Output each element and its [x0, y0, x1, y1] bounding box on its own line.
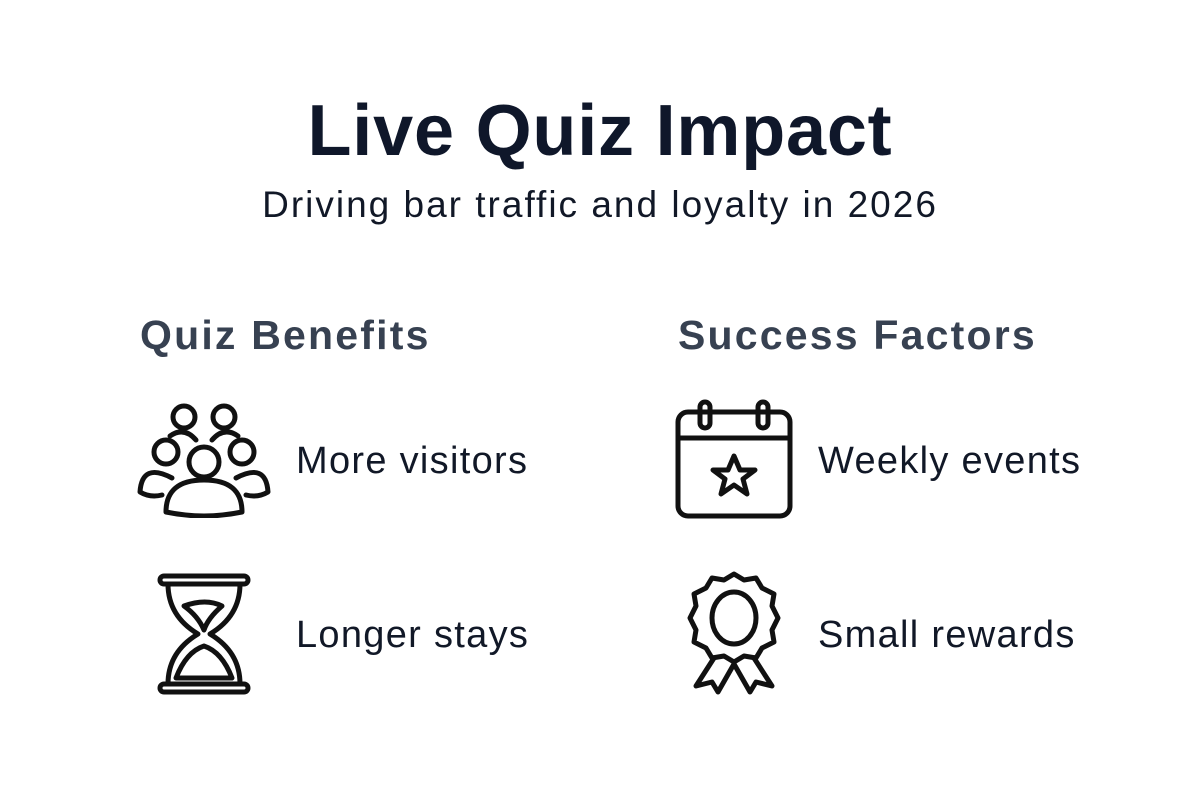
icon: calendar with star — [676, 400, 792, 518]
text: small rewards: Small rewards — [818, 614, 1076, 656]
subtitle: Driving bar traffic and loyalty in 2026 — [262, 184, 938, 225]
text: longer stays: Longer stays — [296, 614, 529, 656]
icon: people — [138, 404, 270, 518]
text: more visitors: More visitors — [296, 440, 528, 482]
icon: hourglass — [158, 574, 250, 694]
heading: success factors: Success Factors — [678, 312, 1037, 358]
title: Live Quiz Impact — [308, 91, 892, 171]
icon: award ribbon — [688, 572, 780, 694]
heading: quiz benefits: Quiz Benefits — [140, 312, 431, 358]
text: weekly events: Weekly events — [818, 440, 1081, 482]
